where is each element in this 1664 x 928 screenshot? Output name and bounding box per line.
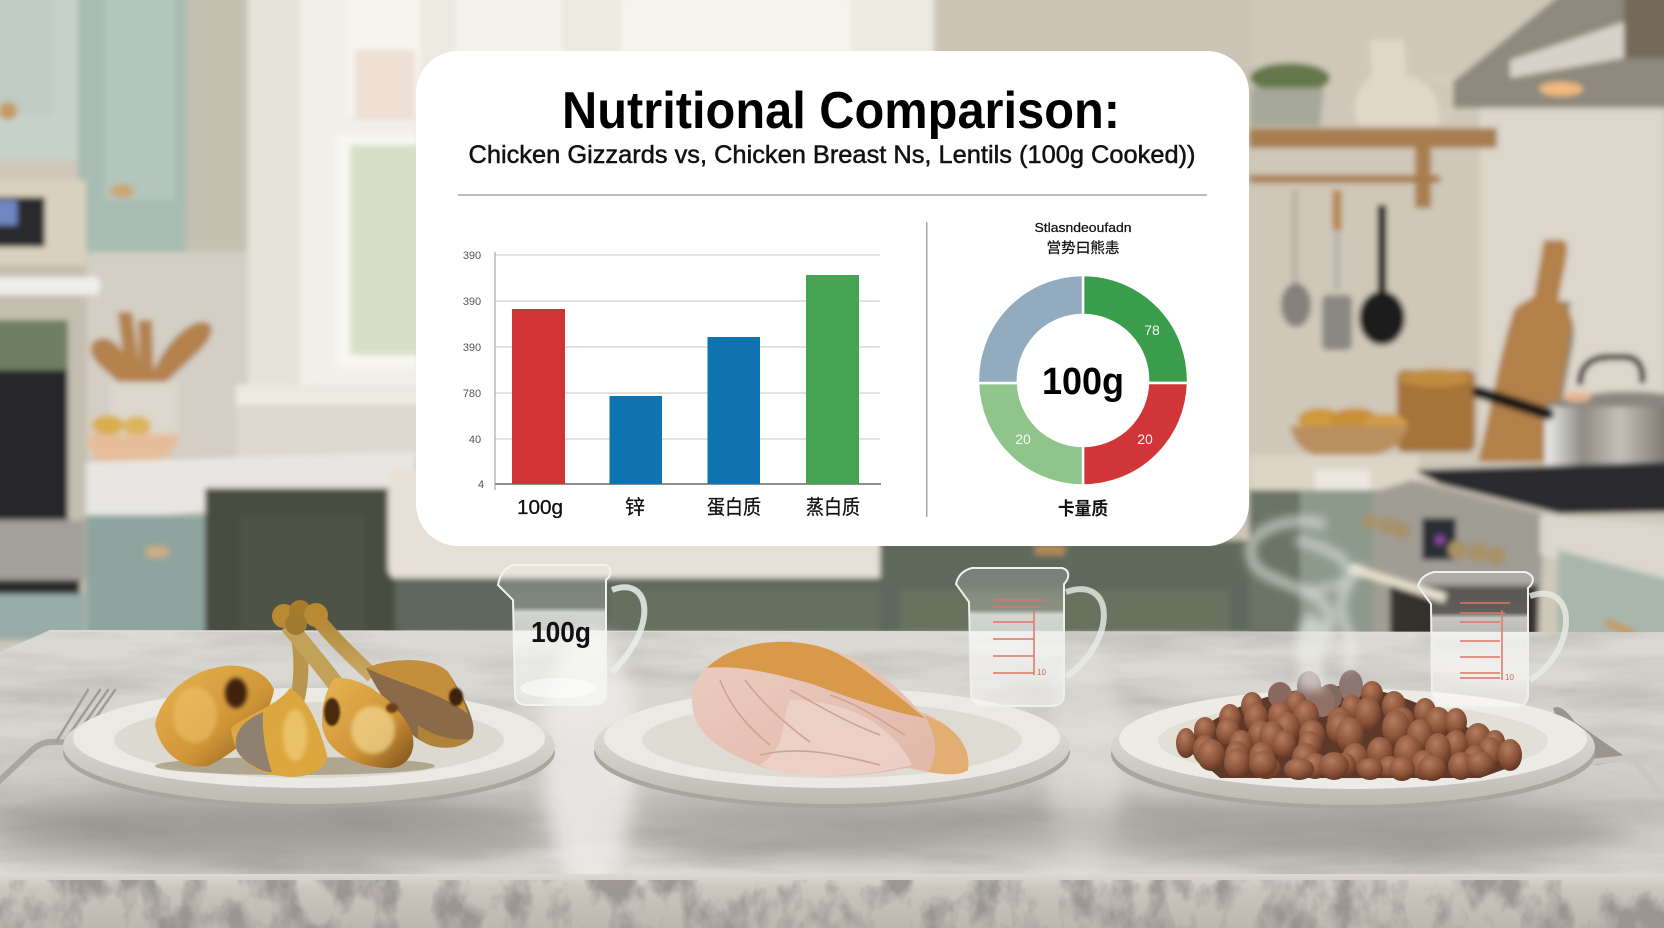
plate: chicken gizzards <box>63 688 555 808</box>
bars <box>512 275 859 484</box>
utensil crock left <box>88 312 212 462</box>
category labels: 锌 <box>625 496 645 519</box>
sink and center cabinets <box>388 470 1260 634</box>
donut headings <box>1034 220 1132 257</box>
measuring cup: right <box>1418 572 1566 707</box>
y axis labels: 4 <box>478 479 484 491</box>
y axis labels <box>463 250 484 491</box>
background: blurred kitchen <box>0 0 1664 640</box>
donut values <box>1015 322 1160 447</box>
measuring cup: middle: 10 <box>1037 668 1046 677</box>
category labels: 蛋白质 <box>707 496 761 519</box>
hanging utensils <box>1281 190 1405 350</box>
cutting board <box>1478 240 1574 462</box>
white jug <box>1355 40 1454 125</box>
category labels <box>517 496 860 519</box>
countertop and cabinet far right <box>1540 515 1664 640</box>
range hood <box>1453 0 1664 108</box>
upper cabinet sage <box>78 0 188 252</box>
y axis labels: 780 <box>463 388 481 400</box>
donut headings: Stlasndeoufadn <box>1034 220 1132 235</box>
table front edge <box>0 874 1664 928</box>
measuring cup: 100g <box>498 565 644 705</box>
left thigh <box>155 665 274 767</box>
upper cabinet left <box>0 0 78 160</box>
donut values: 20 <box>1015 431 1031 447</box>
window top center <box>420 0 1254 75</box>
table reflections <box>542 630 1125 890</box>
donut headings: 営势曰熊恚 <box>1046 240 1120 257</box>
title: Nutritional Comparison: <box>562 82 1120 140</box>
bar chart <box>463 250 881 519</box>
knife <box>1553 707 1664 805</box>
measuring cup: 100g: 100g <box>531 617 591 649</box>
bones <box>272 600 373 700</box>
food: lentils <box>1176 670 1522 781</box>
basket and bowl <box>1290 369 1475 456</box>
food: roasted chicken pieces <box>155 600 474 777</box>
countertop right <box>1249 455 1419 640</box>
saucepan <box>1478 357 1664 465</box>
donut center: 100g <box>1042 361 1124 403</box>
subtitle: Chicken Gizzards vs, Chicken Breast Ns, Lentils (100g Cooked)) <box>468 141 1196 169</box>
backsplash right <box>1249 100 1664 460</box>
food: chicken breast <box>692 642 969 776</box>
steam <box>1250 521 1365 690</box>
category labels: 100g <box>517 497 563 519</box>
backsplash left <box>88 252 426 460</box>
donut chart <box>978 220 1188 519</box>
lower cabinets left <box>86 488 405 638</box>
y axis labels: 40 <box>469 434 481 446</box>
wall oven <box>0 180 100 640</box>
fork <box>0 690 115 785</box>
countertop left <box>86 452 416 524</box>
donut values: 20 <box>1137 431 1153 447</box>
right drumstick <box>322 678 413 768</box>
wooden shelf <box>1249 128 1497 208</box>
category labels: 蒸白质 <box>806 496 860 519</box>
window left <box>325 0 421 390</box>
table top <box>0 630 1664 876</box>
panel: nutrition card <box>416 51 1249 546</box>
plant <box>1250 63 1330 126</box>
marble mottling <box>0 632 1664 874</box>
donut caption: 卡量质 <box>1058 498 1108 519</box>
donut segments <box>978 275 1188 486</box>
y axis labels: 390 <box>463 342 481 354</box>
back thigh <box>366 660 474 748</box>
plate: lentils <box>1111 689 1595 809</box>
measuring cup: middle <box>956 568 1104 706</box>
y axis labels: 390 <box>463 250 481 262</box>
wall column and window trim <box>186 0 325 390</box>
front drumstick <box>231 688 327 777</box>
donut values: 78 <box>1144 322 1160 338</box>
y axis labels: 390 <box>463 296 481 308</box>
measuring cup: right: 10 <box>1505 673 1514 682</box>
gas range <box>1350 462 1664 640</box>
plate: chicken breast <box>594 688 1070 808</box>
plate shadows <box>0 796 1620 868</box>
